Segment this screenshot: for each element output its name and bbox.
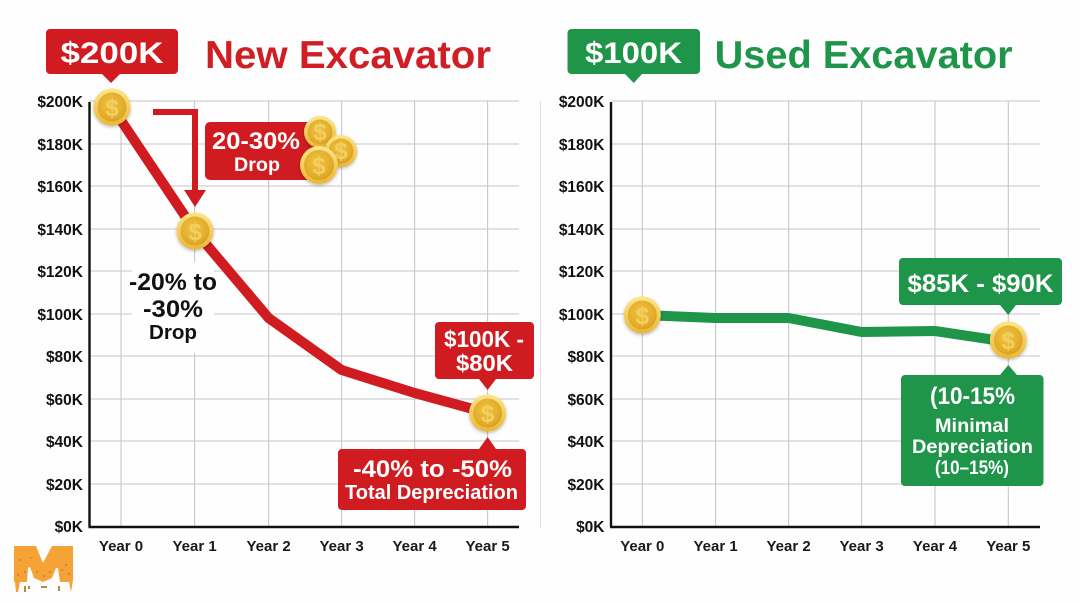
callout: minimal depreciation: Depreciation [912, 436, 1033, 458]
annotation: -20% to -30% drop: -20% to [129, 269, 217, 296]
arrow: year 1 drop [153, 109, 206, 207]
line: used excavator value [642, 315, 1008, 342]
y axis labels: used excavator: $40K [567, 434, 605, 451]
x axis labels: new excavator: Year 2 [246, 538, 291, 555]
coin: year 0: $ [105, 95, 119, 122]
callout: 20-30% drop [205, 122, 317, 180]
coin: year 5: $ [1002, 328, 1016, 355]
annotation: -20% to -30% drop: -30% [143, 296, 203, 323]
price badge: $200K [46, 29, 178, 83]
price badge: $100K: $100K [585, 37, 682, 70]
y axis labels: used excavator: $0K [576, 519, 605, 536]
coin: $ [313, 119, 327, 146]
x axis labels: used excavator: Year 2 [766, 538, 811, 555]
y axis labels: used excavator: $180K [559, 137, 605, 154]
y axis labels: new excavator: $20K [46, 477, 84, 494]
y axis labels: new excavator: $100K [37, 307, 84, 324]
price badge: $100K [568, 29, 700, 83]
y axis labels: used excavator: $60K [567, 392, 605, 409]
panel: used excavator [559, 29, 1062, 555]
y axis labels: used excavator: $100K [559, 307, 605, 324]
y axis labels: new excavator: $80K [46, 349, 84, 366]
x axis labels: new excavator: Year 4 [392, 538, 437, 555]
x axis labels: used excavator: Year 5 [986, 538, 1030, 555]
y axis labels: new excavator: $0K [55, 519, 84, 536]
coin: year 5 [469, 394, 506, 432]
y axis labels: new excavator: $140K [37, 222, 84, 239]
icon: coin stack [300, 116, 357, 184]
annotation: -20% to -30% drop [129, 269, 217, 344]
x axis labels: used excavator: Year 4 [913, 538, 958, 555]
coin: year 1: $ [188, 219, 202, 246]
heading: new excavator: New Excavator [205, 34, 491, 77]
y axis labels: used excavator: $200K [559, 94, 605, 111]
y axis labels: used excavator: $120K [559, 264, 605, 281]
x axis labels: used excavator: Year 3 [839, 538, 884, 555]
chart grid: new excavator [88, 101, 519, 527]
y axis labels: used excavator: $140K [559, 222, 605, 239]
y axis labels: used excavator: $80K [567, 349, 605, 366]
panel: new excavator [37, 29, 534, 555]
coin: year 5 [990, 322, 1027, 358]
y axis labels: used excavator: $160K [559, 179, 605, 196]
callout: minimal depreciation: (10-15% [930, 383, 1015, 410]
coin: year 0 [94, 88, 130, 126]
y axis labels: used excavator [559, 94, 605, 536]
callout: 20-30% drop: 20-30% [212, 128, 300, 155]
coin: $ [312, 153, 326, 180]
callout: $100K - $80K [435, 322, 534, 390]
logo: orange M [14, 546, 73, 592]
annotation: -20% to -30% drop: Drop [149, 322, 197, 344]
coin: year 1 [176, 212, 214, 250]
x axis labels: new excavator: Year 3 [319, 538, 364, 555]
y axis labels: new excavator: $180K [37, 137, 84, 154]
callout: 20-30% drop: Drop [234, 155, 280, 176]
callout: $100K - $80K: $80K [456, 350, 513, 376]
x axis labels: new excavator: Year 1 [172, 538, 217, 555]
coin: year 0 [624, 296, 661, 334]
line: new excavator value [112, 107, 488, 413]
x axis labels: new excavator [99, 538, 510, 555]
y axis labels: used excavator: $20K [567, 477, 605, 494]
price badge: $200K: $200K [60, 37, 164, 70]
callout: total depreciation [338, 437, 526, 510]
chart grid: used excavator [610, 101, 1040, 527]
coin: $ [334, 138, 348, 165]
callout: $100K - $80K: $100K - [444, 326, 524, 352]
x axis labels: used excavator: Year 1 [693, 538, 738, 555]
coin: year 5: $ [481, 401, 495, 428]
x axis labels: used excavator [620, 538, 1030, 555]
callout: minimal depreciation: (10–15%) [935, 457, 1009, 479]
y axis labels: new excavator: $60K [46, 392, 84, 409]
y axis labels: new excavator: $200K [37, 94, 84, 111]
coin: year 0: $ [636, 303, 650, 330]
heading: used excavator: Used Excavator [715, 34, 1013, 77]
callout: total depreciation: -40% to -50% [353, 456, 512, 483]
y axis labels: new excavator: $120K [37, 264, 84, 281]
y axis labels: new excavator: $160K [37, 179, 84, 196]
callout: $85K - $90K: $85K - $90K [908, 270, 1054, 298]
x axis labels: used excavator: Year 0 [620, 538, 664, 555]
callout: minimal depreciation: Minimal [935, 415, 1009, 437]
y axis labels: new excavator [37, 94, 84, 536]
y axis labels: new excavator: $40K [46, 434, 84, 451]
x axis labels: new excavator: Year 5 [465, 538, 510, 555]
callout: minimal depreciation [901, 365, 1044, 486]
callout: total depreciation: Total Depreciation [345, 482, 518, 504]
callout: $85K - $90K [899, 258, 1062, 315]
x axis labels: new excavator: Year 0 [99, 538, 143, 555]
